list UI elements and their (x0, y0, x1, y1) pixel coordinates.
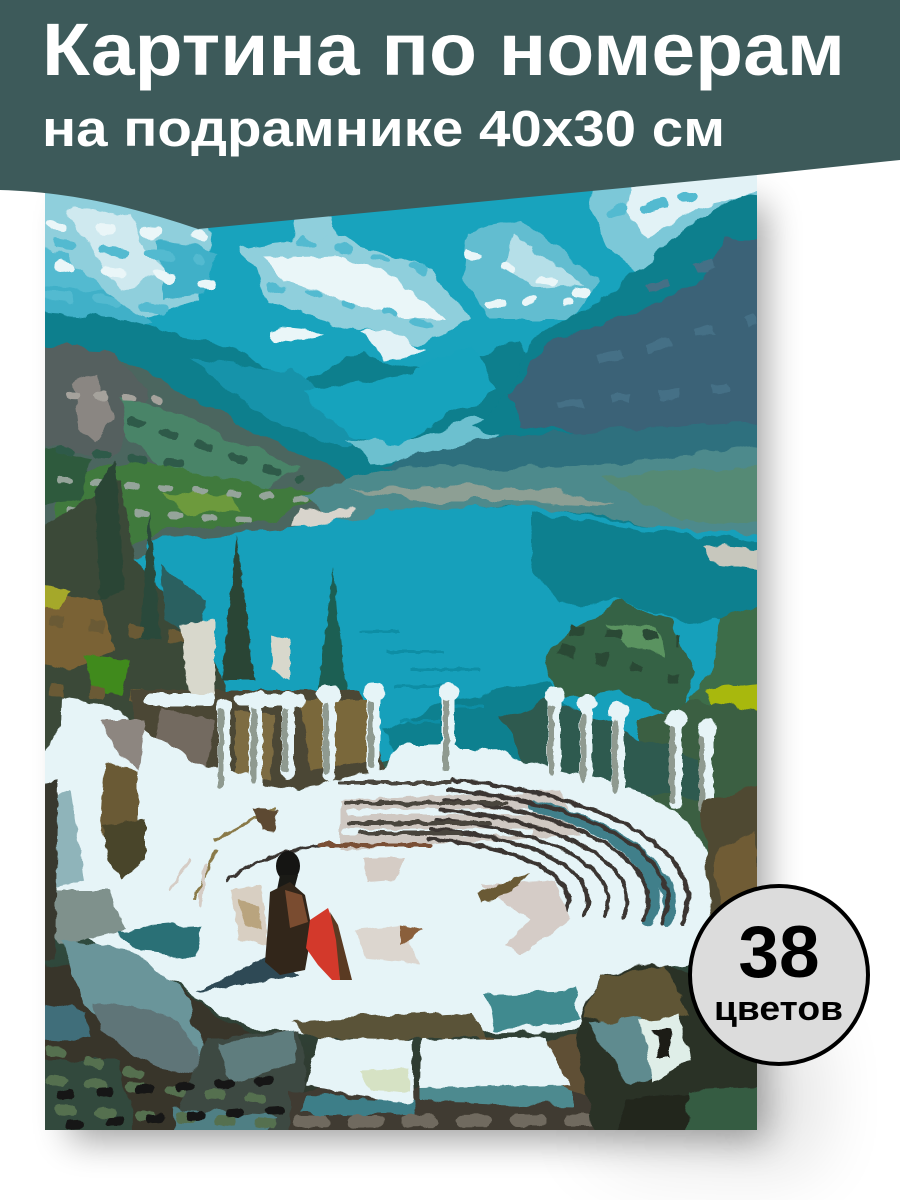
subtitle: на подрамнике 40х30 см (42, 100, 725, 157)
right trees (498, 598, 757, 853)
badge caption: цветов (714, 990, 843, 1028)
title: Картина по номерам (42, 8, 845, 91)
seating rows (170, 780, 688, 924)
sky with clouds (20, 165, 790, 356)
orchestra stains (230, 808, 570, 965)
colour count badge (690, 886, 868, 1064)
foreground mottling (50, 1050, 590, 1125)
hillside mottling (60, 395, 320, 520)
foreground rocks and dark ground (45, 922, 594, 1130)
lake (150, 505, 790, 760)
left hillside with green slopes (45, 342, 346, 560)
painting: ancient amphitheatre above a mountain lake (45, 175, 757, 1130)
left ruins and statue (45, 719, 147, 960)
right side brush and rock (576, 786, 757, 1130)
left cypress trees and vegetation (45, 460, 348, 750)
number of colours: 38 (738, 912, 820, 993)
far shore band (291, 446, 757, 537)
white stone slabs (306, 1038, 570, 1103)
right slate mountain (380, 194, 757, 472)
water ripples (360, 630, 485, 723)
stone columns (150, 692, 708, 812)
seated woman in red (196, 851, 352, 992)
distant teal mountains (45, 310, 648, 528)
cloud mottling (50, 195, 690, 330)
amphitheatre white floor (55, 700, 720, 1035)
canvas drop shadow (70, 205, 810, 1160)
red cloth (306, 908, 340, 980)
brown backdrop behind left colonnade (130, 620, 385, 810)
top banner (0, 0, 900, 229)
